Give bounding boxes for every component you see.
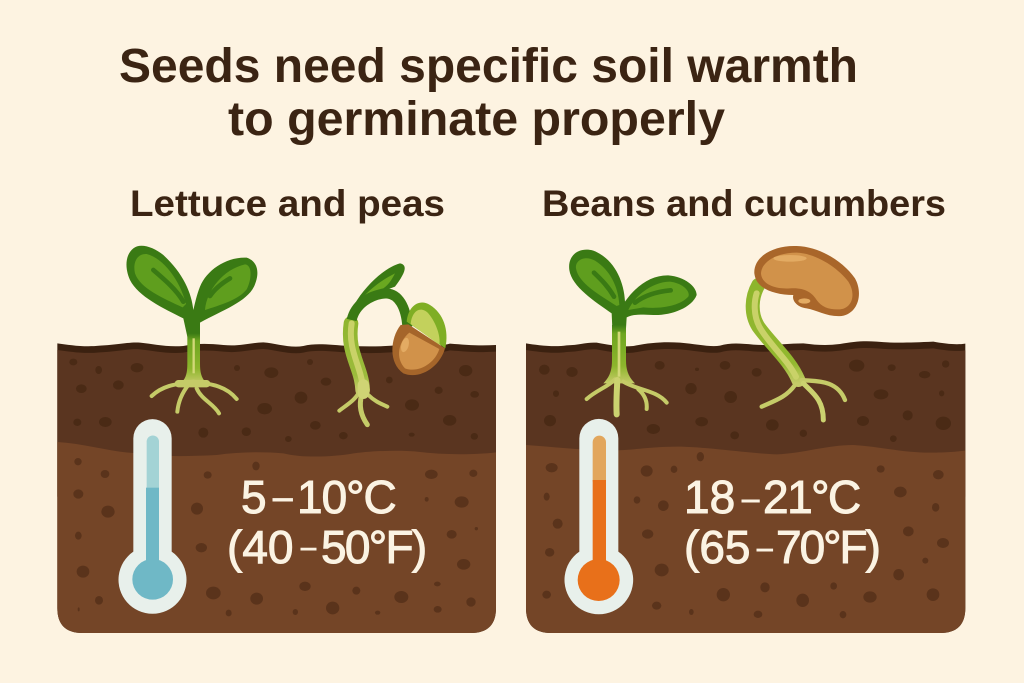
temperature label: warm: (65 [684, 521, 750, 573]
soil block: right [526, 341, 965, 633]
icon: cucumber seedling [569, 250, 697, 414]
temperature label: cold: (40 [227, 521, 293, 573]
temperature label: cold: 50°F) [321, 521, 425, 573]
temperature label: cold: 10°C [297, 471, 396, 523]
heading: beans and cucumbers: Beans and cucumbers [542, 183, 946, 224]
temperature label: warm: 70°F) [776, 521, 879, 573]
title: to germinate properly [228, 93, 725, 146]
temperature label: warm: – [742, 481, 760, 516]
soil block: left [57, 342, 496, 633]
temperature label: cold: – [301, 532, 316, 562]
temperature label: cold: – [273, 478, 293, 517]
temperature label: warm: – [757, 532, 773, 563]
panel: lettuce and peas [57, 183, 496, 633]
title [119, 40, 858, 146]
icon: thermometer warm [564, 419, 633, 614]
title: Seeds need specific soil warmth [119, 40, 858, 93]
temperature label: warm [684, 471, 879, 573]
icon: thermometer cold [118, 419, 186, 614]
temperature label: cold [227, 471, 425, 573]
temperature label: warm: 18 [684, 471, 735, 523]
temperature label: warm: 21°C [763, 471, 860, 523]
icon: pea sprout [339, 263, 447, 425]
icon: bean sprout [753, 246, 859, 420]
temperature label: cold: 5 [241, 471, 267, 523]
icon: lettuce seedling [126, 246, 257, 413]
heading: lettuce and peas: Lettuce and peas [130, 183, 445, 224]
panel: beans and cucumbers [526, 183, 965, 633]
